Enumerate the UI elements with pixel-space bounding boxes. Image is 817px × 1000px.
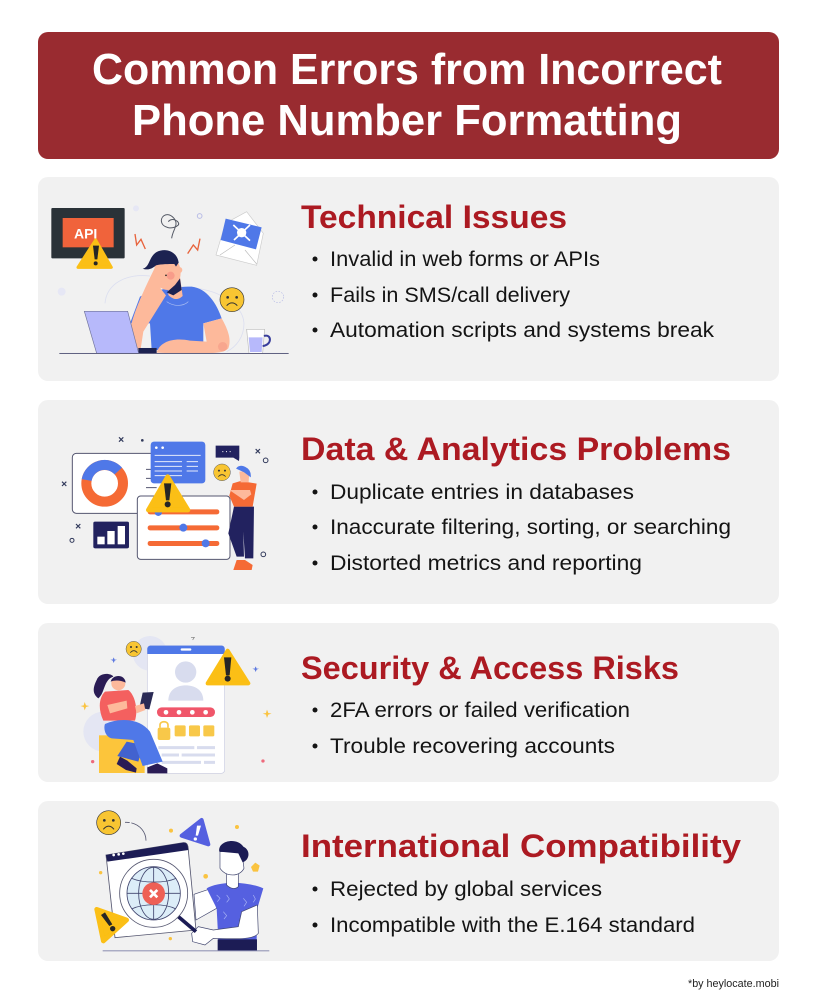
heading: Data & Analytics Problems <box>301 431 731 467</box>
bullet list: Invalid in web forms or APIs <box>330 248 600 271</box>
heading: International Compatibility <box>301 828 741 864</box>
illustration: woman with phone login screen <box>80 636 272 773</box>
title banner: Phone Number Formatting <box>132 96 682 145</box>
panel: security and access risks <box>38 623 779 782</box>
bullet list: Trouble recovering accounts <box>330 735 615 758</box>
bullet list: 2FA errors or failed verification <box>330 699 630 722</box>
bullet list <box>312 248 715 342</box>
heading: Security & Access Risks <box>301 650 679 686</box>
panel: international compatibility <box>38 801 779 961</box>
bullet list: Automation scripts and systems break <box>330 319 715 342</box>
title banner <box>38 32 779 159</box>
illustration: frustrated man at laptop <box>51 205 289 354</box>
title banner: Common Errors from Incorrect <box>92 45 722 94</box>
bullet list: Duplicate entries in databases <box>330 481 634 504</box>
heading: Technical Issues <box>301 199 567 235</box>
body <box>130 287 222 350</box>
source credit: *by heylocate.mobi <box>688 978 779 990</box>
bullet list: Incompatible with the E.164 standard <box>330 914 695 937</box>
bullet list <box>312 481 731 575</box>
illustration: frustrated man at laptop: API <box>74 225 97 241</box>
bullet list: Rejected by global services <box>330 878 602 901</box>
bullet list: Fails in SMS/call delivery <box>330 284 571 307</box>
bullet list: Inaccurate filtering, sorting, or searching <box>330 516 731 539</box>
panel: data and analytics problems <box>38 400 779 604</box>
bullet list <box>312 878 695 937</box>
panel: technical issues <box>38 177 779 381</box>
illustration: man with magnifier over globe <box>97 811 269 951</box>
bullet list: Distorted metrics and reporting <box>330 552 642 575</box>
illustration: dashboard with warning <box>62 437 268 570</box>
bullet list <box>312 699 630 758</box>
